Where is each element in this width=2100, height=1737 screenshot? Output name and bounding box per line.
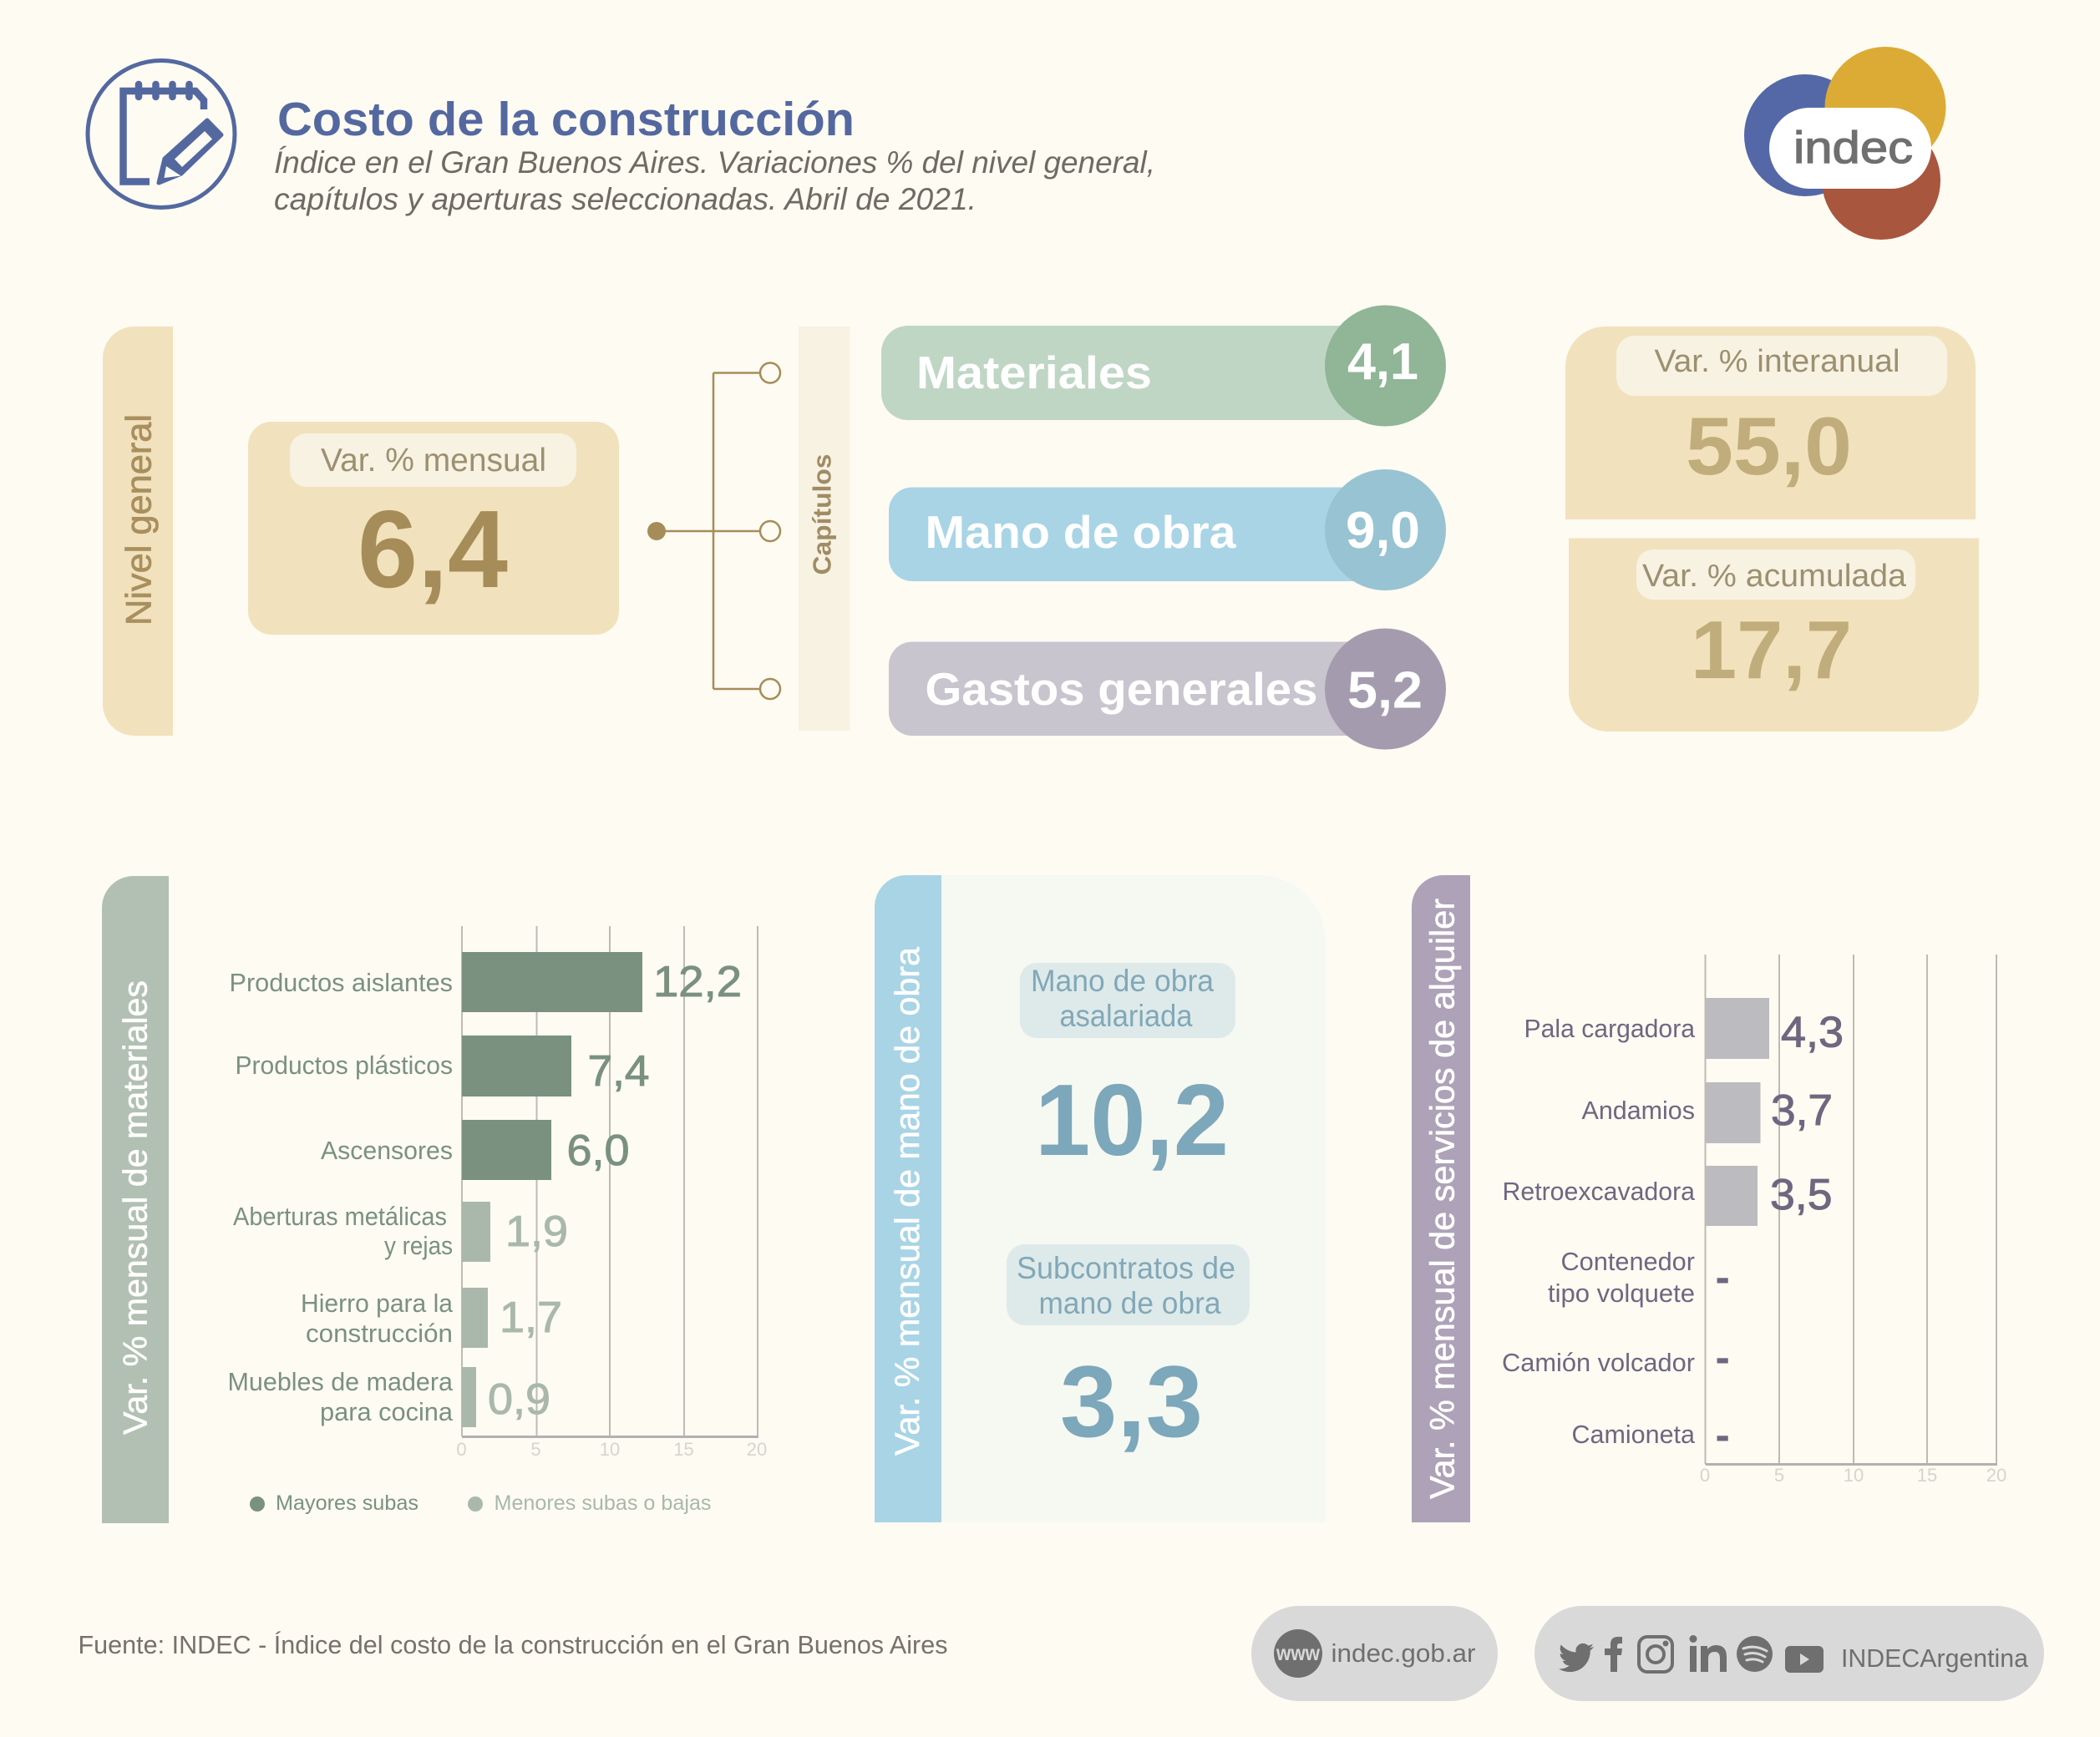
capítulo: mano de obra: 9,0 (1346, 502, 1420, 560)
website pill (1251, 1606, 1498, 1701)
bar chart: servicios de alquiler: 3,5 (1770, 1171, 1833, 1219)
bar chart: servicios de alquiler: 0 (1700, 1465, 1710, 1486)
bar chart: materiales: 20 (747, 1439, 767, 1460)
bar chart: servicios de alquiler: 4,3 (1781, 1009, 1844, 1057)
bar chart: servicios de alquiler: 20 (1986, 1465, 2006, 1486)
bar chart: materiales: para cocina (320, 1397, 454, 1426)
pill: subcontratos: Subcontratos de (1017, 1251, 1235, 1285)
logo: indec (1744, 47, 1946, 240)
website pill: indec.gob.ar (1332, 1638, 1475, 1668)
bar chart: servicios de alquiler: Contenedor (1560, 1247, 1695, 1276)
panel: nivel general: Nivel general (119, 414, 159, 625)
capítulo: materiales (881, 306, 1446, 426)
title: Costo de la construcción (277, 93, 855, 146)
bar chart: materiales: Productos plásticos (236, 1051, 453, 1080)
bar chart: servicios de alquiler: Pala cargadora (1524, 1014, 1696, 1043)
subtitle: capítulos y aperturas seleccionadas. Abril de 2021. (274, 182, 976, 216)
bar chart: servicios de alquiler: - (1716, 1411, 1730, 1460)
panel: var mensual: Var. % mensual (321, 443, 546, 479)
bar chart: servicios de alquiler: 15 (1917, 1465, 1937, 1486)
bar chart: materiales: 15 (673, 1439, 694, 1460)
capítulo: gastos generales: 5,2 (1347, 661, 1423, 720)
pill: mano de obra asalariada: Mano de obra (1031, 964, 1214, 998)
handle: INDECArgentina (1841, 1643, 2029, 1673)
pill: subcontratos: mano de obra (1039, 1286, 1221, 1320)
panel: var interanual (1565, 327, 1976, 519)
bar chart: servicios de alquiler: - (1716, 1253, 1730, 1302)
bar chart: materiales: 1,7 (500, 1294, 562, 1342)
panel: nivel general (103, 327, 173, 736)
icon: spotify (1737, 1636, 1773, 1672)
bar chart: materiales: 0 (456, 1439, 467, 1460)
capítulo: gastos generales: Gastos generales (926, 663, 1318, 715)
panel: var acumulada: 17,7 (1691, 604, 1852, 696)
bar chart: servicios de alquiler: Camión volcador (1502, 1348, 1695, 1377)
bar chart: materiales: 10 (600, 1439, 620, 1460)
connector (647, 362, 780, 699)
panel: servicios de alquiler strip: Var. % mensual de servicios de alquiler (1423, 899, 1462, 1499)
bar chart: materiales: y rejas (384, 1231, 453, 1260)
panel: capítulos: Capítulos (807, 454, 837, 575)
bar chart: materiales: Productos aislantes (229, 968, 453, 997)
icon: notebook and pencil (88, 60, 235, 207)
capítulo: mano de obra (889, 469, 1446, 590)
panel: var interanual: Var. % interanual (1654, 344, 1900, 379)
bar chart: servicios de alquiler: Andamios (1582, 1096, 1695, 1125)
icon: linkedin (1689, 1635, 1727, 1672)
bar chart: materiales: 0,9 (488, 1375, 550, 1424)
legend: Mayores subas (276, 1491, 418, 1515)
panel: servicios de alquiler strip (1412, 875, 1470, 1522)
panel: capítulos (799, 327, 850, 731)
panel: var mensual: 6,4 (358, 488, 508, 610)
bar chart: materiales: construcción (306, 1319, 453, 1348)
bar chart: materiales: Ascensores (321, 1136, 453, 1165)
pill: subcontratos (1007, 1244, 1250, 1325)
bar chart: materiales: 5 (530, 1439, 541, 1460)
panel: var acumulada: Var. % acumulada (1642, 559, 1907, 594)
panel: mano de obra (875, 875, 1326, 1522)
icon: youtube (1785, 1646, 1824, 1673)
website pill: www (1276, 1642, 1320, 1665)
panel: materiales strip: Var. % mensual de materiales (117, 980, 154, 1435)
icon: twitter (1559, 1643, 1594, 1672)
panel: var interanual: 55,0 (1686, 400, 1852, 492)
logo: indec: indec (1793, 123, 1913, 173)
bar chart: servicios de alquiler: Retroexcavadora (1502, 1177, 1696, 1206)
social pill (1534, 1606, 2044, 1701)
bar chart: materiales: 1,9 (505, 1208, 568, 1256)
bar chart: materiales: 12,2 (653, 958, 742, 1006)
panel: materiales strip (102, 876, 169, 1523)
pill: mano de obra asalariada (1020, 963, 1235, 1038)
legend: Menores subas o bajas (495, 1491, 712, 1515)
capítulo: gastos generales (889, 628, 1446, 750)
legend (250, 1491, 712, 1515)
icon: facebook (1605, 1637, 1622, 1672)
bar chart: materiales: Aberturas metálicas (233, 1202, 447, 1231)
bar chart: materiales: 6,0 (566, 1127, 630, 1175)
bar chart: materiales: Muebles de madera (227, 1367, 454, 1396)
pill: mano de obra asalariada: asalariada (1059, 999, 1193, 1033)
subtitle: Índice en el Gran Buenos Aires. Variaciones % del nivel general, (274, 145, 1155, 180)
bar chart: servicios de alquiler: 10 (1844, 1465, 1864, 1486)
bar chart: servicios de alquiler: 3,7 (1771, 1086, 1833, 1135)
capítulo: materiales: Materiales (916, 347, 1152, 398)
bar chart: materiales (227, 926, 767, 1460)
bar chart: materiales: Hierro para la (301, 1289, 454, 1318)
panel: var acumulada (1569, 538, 1979, 732)
bar chart: servicios de alquiler: Camioneta (1572, 1420, 1696, 1449)
value: asalariada: 10,2 (1035, 1063, 1229, 1177)
capítulo: mano de obra: Mano de obra (926, 506, 1236, 558)
bar chart: servicios de alquiler (1502, 955, 2006, 1486)
bar chart: servicios de alquiler: - (1716, 1334, 1730, 1382)
panel: var mensual (248, 422, 619, 635)
bar chart: servicios de alquiler: 5 (1774, 1465, 1784, 1486)
icon: instagram (1639, 1637, 1672, 1672)
subtitle (274, 145, 1155, 216)
bar chart: servicios de alquiler: tipo volquete (1548, 1279, 1695, 1308)
capítulo: materiales: 4,1 (1347, 333, 1418, 391)
value: subcontratos: 3,3 (1060, 1345, 1203, 1458)
bar chart: materiales: 7,4 (588, 1047, 650, 1096)
source note: Fuente: INDEC - Índice del costo de la construcción en el Gran Buenos Aires (79, 1630, 947, 1659)
panel: mano de obra: Var. % mensual de mano de obra (888, 947, 926, 1456)
